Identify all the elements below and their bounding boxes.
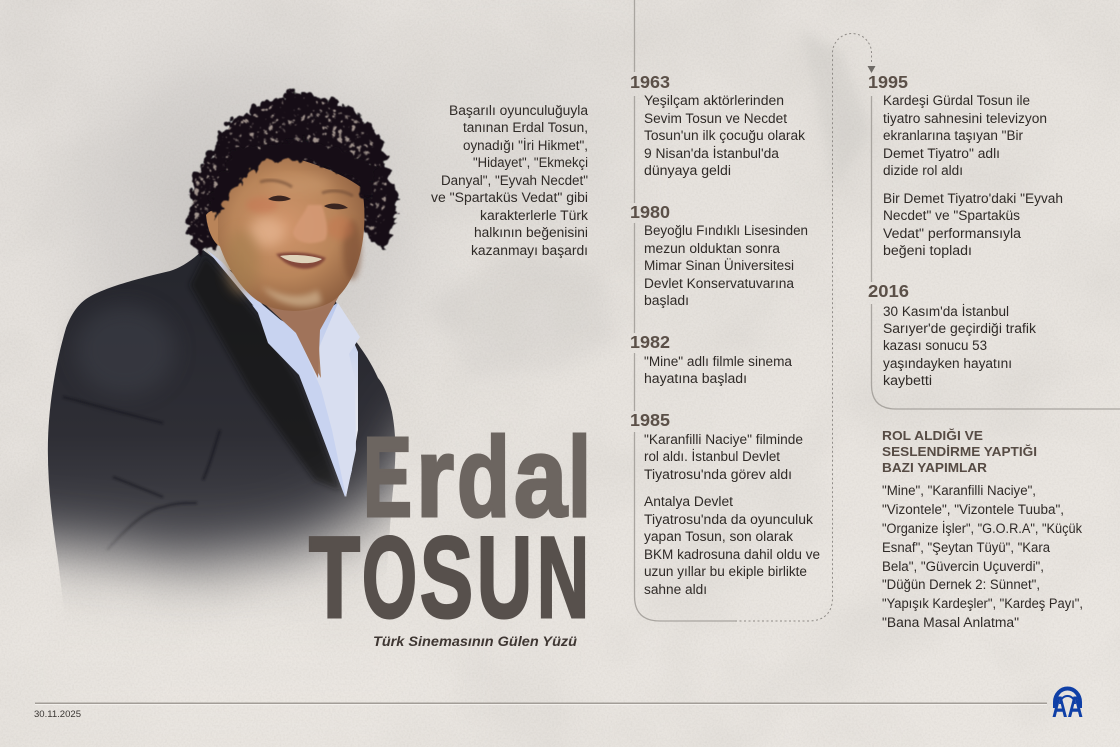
event: 2016 (868, 281, 1036, 388)
jacket (48, 250, 396, 607)
event: 1995: Vedat" performansıyla (883, 226, 1022, 241)
event: 2016: 2016 (868, 281, 909, 301)
title: Erdal Tosun: U (477, 514, 532, 642)
filmography list: "Yapışık Kardeşler", "Kardeş Payı", (882, 596, 1083, 611)
event: 1982: "Mine" adlı filmle sinema (644, 354, 793, 369)
event: 1995: Demet Tiyatro" adlı (883, 146, 1000, 161)
event: 1963: 9 Nisan'da İstanbul'da (644, 146, 780, 161)
hair fringe (205, 135, 372, 215)
event: 1995: ekranlarına taşıyan "Bir (883, 128, 1024, 143)
event: 1985: Tiyatrosu'nda görev aldı (644, 467, 792, 482)
event: 1980 (630, 202, 808, 308)
heading: filmography (882, 428, 1037, 475)
eyes (268, 196, 291, 201)
event: 2016: Sarıyer'de geçirdiği trafik (883, 321, 1036, 336)
date: 30.11.2025 (34, 709, 81, 720)
intro paragraph: tanınan Erdal Tosun, (463, 120, 588, 135)
shirt and collar (207, 250, 360, 497)
filmography list: "Düğün Dernek 2: Sünnet", (882, 577, 1040, 592)
event: 1985: BKM kadrosuna dahil oldu ve (644, 547, 820, 562)
event: 1995 (868, 72, 1063, 258)
event: 1982: hayatına başladı (644, 371, 747, 386)
title: Erdal Tosun: E (363, 414, 412, 540)
intro paragraph: oynadığı "İri Hikmet", (463, 138, 588, 153)
event: 2016: yaşındayken hayatını (883, 356, 1012, 371)
timeline connector lines (634, 0, 1120, 621)
event: 1985: "Karanfilli Naciye" filminde (644, 432, 803, 447)
event: 1980: Mimar Sinan Üniversitesi (644, 258, 794, 273)
event: 1963: Yeşilçam aktörlerinden (644, 93, 784, 108)
hair back (184, 90, 393, 250)
event: 2016: kazası sonucu 53 (883, 338, 987, 353)
title: Erdal Tosun: r (416, 414, 454, 540)
event: 1995: tiyatro sahnesini televizyon (883, 111, 1047, 126)
event: 1985: Tiyatrosu'nda da oyunculuk (644, 512, 813, 527)
filmography list: Esnaf", "Şeytan Tüyü", "Kara (882, 540, 1051, 555)
logo: Anadolu Agency: AA (1052, 691, 1083, 724)
filmography list: "Mine", "Karanfilli Naciye", (882, 483, 1036, 498)
event: 2016: 30 Kasım'da İstanbul (883, 304, 1009, 319)
event: 1995: Necdet" ve "Spartaküs (883, 208, 1020, 223)
heading: filmography: ROL ALDIĞI VE (882, 428, 983, 443)
intro paragraph: karakterlerle Türk (480, 208, 588, 223)
event: 1985 (630, 410, 820, 597)
event: 1985: 1985 (630, 410, 670, 430)
title: Erdal Tosun: T (309, 514, 360, 642)
event: 1980: 1980 (630, 202, 670, 222)
filmography list: "Vizontele", "Vizontele Tuuba", (882, 502, 1064, 517)
event: 1980: mezun olduktan sonra (644, 241, 781, 256)
intro paragraph: Başarılı oyunculuğuyla (449, 103, 589, 118)
event: 1995: Bir Demet Tiyatro'daki "Eyvah (883, 191, 1063, 206)
title: Erdal Tosun: S (420, 514, 473, 642)
title: Erdal Tosun: a (514, 414, 568, 540)
event: 1995: Kardeşi Gürdal Tosun ile (883, 93, 1030, 108)
intro paragraph (431, 103, 589, 258)
title: Erdal Tosun (309, 414, 591, 642)
intro paragraph: "Hidayet", "Ekmekçi (473, 155, 588, 170)
event: 1963: 1963 (630, 72, 670, 92)
subtitle: Türk Sinemasının Gülen Yüzü (373, 633, 577, 649)
event: 1980: Devlet Konservatuvarına (644, 276, 795, 291)
event: 1995: 1995 (868, 72, 908, 92)
footer rule (35, 702, 1047, 705)
event: 1982: 1982 (630, 332, 670, 352)
intro paragraph: halkının beğenisini (474, 225, 588, 240)
filmography list (882, 483, 1083, 630)
title: Erdal Tosun: l (568, 414, 591, 540)
intro paragraph: ve "Spartaküs Vedat" gibi (431, 190, 588, 205)
event: 1995: beğeni topladı (883, 243, 972, 258)
mouth (276, 252, 326, 269)
heading: filmography: SESLENDİRME YAPTIĞI (882, 444, 1037, 459)
filmography list: "Organize İşler", "G.O.R.A", "Küçük (882, 521, 1082, 536)
event: 1985: uzun yıllar bu ekiple birlikte (644, 564, 807, 579)
event: 1985: rol aldı. İstanbul Devlet (644, 449, 780, 464)
event: 1963 (630, 72, 805, 178)
logo: Anadolu Agency (1052, 688, 1083, 724)
event: 1980: başladı (644, 293, 689, 308)
intro paragraph: Danyal", "Eyvah Necdet" (441, 173, 588, 188)
title: Erdal Tosun: N (537, 514, 589, 642)
event: 1963: Sevim Tosun ve Necdet (644, 111, 787, 126)
event: 1982 (630, 332, 793, 386)
event: 1985: sahne aldı (644, 582, 707, 597)
event: 1963: dünyaya geldi (644, 163, 731, 178)
ear (206, 211, 224, 248)
face (218, 152, 364, 311)
event: 1963: Tosun'un ilk çocuğu olarak (644, 128, 805, 143)
heading: filmography: BAZI YAPIMLAR (882, 461, 987, 475)
event: 1980: Beyoğlu Fındıklı Lisesinden (644, 223, 808, 238)
title: Erdal Tosun: d (457, 414, 510, 540)
title: Erdal Tosun: O (362, 514, 417, 642)
neck (258, 294, 340, 378)
nose (293, 205, 327, 243)
portrait: Erdal Tosun (48, 90, 395, 660)
event: 1985: yapan Tosun, son olarak (644, 529, 793, 544)
event: 1995: dizide rol aldı (883, 163, 963, 178)
filmography list: Bela", "Güvercin Uçuverdi", (882, 559, 1044, 574)
event: 1985: Antalya Devlet (644, 494, 733, 509)
event: 2016: kaybetti (883, 373, 932, 388)
intro paragraph: kazanmayı başardı (471, 243, 588, 258)
filmography list: "Bana Masal Anlatma" (882, 615, 1019, 630)
